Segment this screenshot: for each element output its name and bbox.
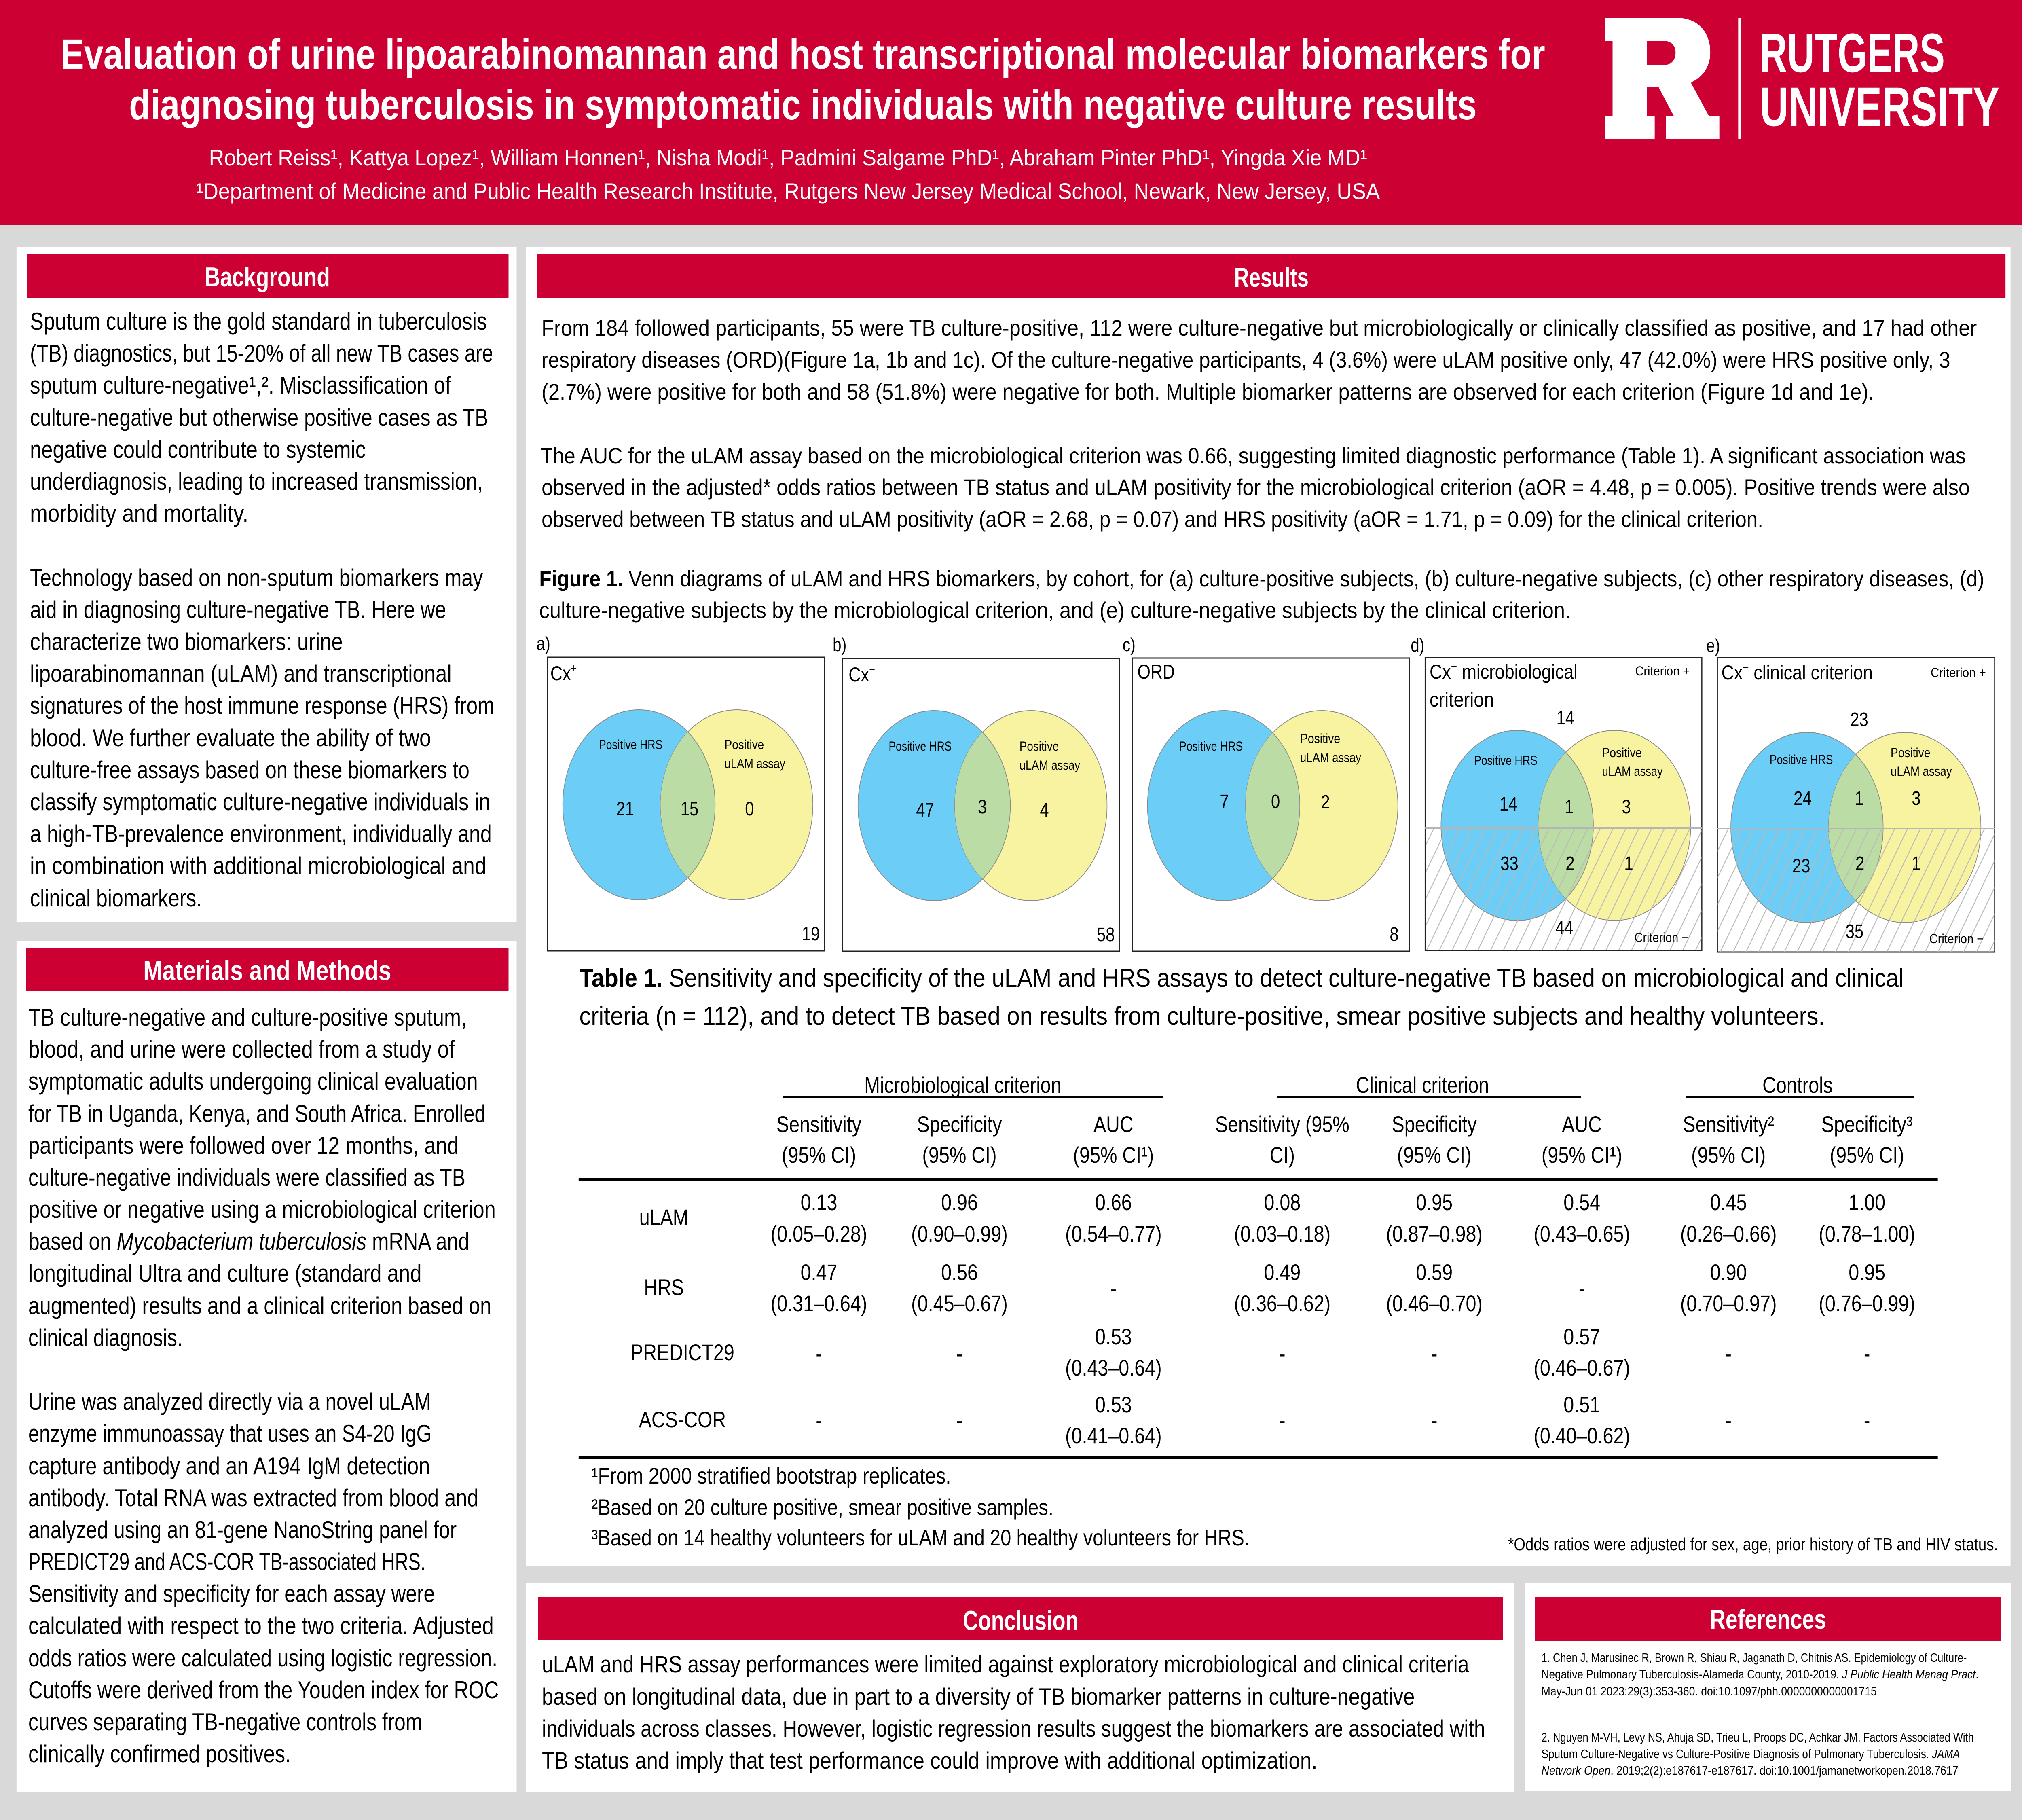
table column headers: (95% CI) (1397, 1142, 1472, 1168)
methods text block: analyzed using an 81-gene NanoString panel for (28, 1516, 457, 1543)
venn diagram d: microbiological criterion: 1 (1565, 796, 1574, 818)
methods text block: longitudinal Ultra and culture (standard and (28, 1260, 422, 1287)
methods text block: curves separating TB-negative controls from (28, 1708, 422, 1735)
background text block: blood. We further evaluate the ability of two (30, 724, 431, 751)
conclusion text: TB status and imply that test performance could improve with additional optimization. (542, 1748, 1318, 1774)
reference 1 (1542, 1651, 1979, 1699)
table row: uLAM: 1.00 (1849, 1189, 1885, 1215)
venn diagram c: other respiratory diseases: 7 (1220, 791, 1229, 813)
table column headers: (95% CI) (1830, 1142, 1904, 1168)
venn diagram e: clinical criterion: Criterion + (1931, 666, 1986, 680)
methods text block: Cutoffs were derived from the Youden index for ROC (28, 1676, 499, 1704)
figure 1 caption: Figure 1. Venn diagrams of uLAM and HRS biomarkers, by cohort, for (a) culture-positive subjects, (b) culture-negative subjects, (c) other respiratory diseases, (d) (539, 566, 1984, 591)
table group headers (783, 1072, 1914, 1098)
table row: ACS-COR: - (1864, 1407, 1870, 1433)
venn diagram c: other respiratory diseases: Positive HRS (1179, 739, 1243, 754)
table column headers (776, 1111, 1912, 1168)
methods text block: antibody. Total RNA was extracted from blood and (28, 1484, 478, 1511)
reference 1: 1. Chen J, Marusinec R, Brown R, Shiau R, Jaganath D, Chitnis AS. Epidemiology of Culture- (1542, 1651, 1967, 1665)
table row: uLAM: (0.90–0.99) (911, 1221, 1008, 1246)
results text: participants (541, 315, 1977, 404)
background text block: clinical biomarkers. (30, 885, 202, 912)
table row: ACS-COR: 0.53 (1095, 1392, 1132, 1417)
table column headers: Sensitivity² (1683, 1111, 1774, 1137)
background text block: characterize two biomarkers: urine (30, 628, 343, 655)
table row: HRS: 0.95 (1849, 1259, 1885, 1285)
venn diagram e: clinical criterion: 3 (1912, 788, 1920, 809)
venn diagram d: microbiological criterion (1411, 635, 1702, 950)
table row: uLAM: 0.08 (1264, 1189, 1301, 1215)
venn diagram b: culture negative (833, 635, 1119, 951)
conclusion text: individuals across classes. However, logistic regression results suggest the biomarkers are associated with (542, 1716, 1485, 1742)
table 1 caption: Table 1. Sensitivity and specificity of the uLAM and HRS assays to detect culture-negative TB based on microbiological and clinical (579, 964, 1904, 993)
table row: uLAM: 0.45 (1710, 1189, 1747, 1215)
venn diagram d: microbiological criterion: microbiological (1457, 660, 1578, 683)
table group headers: Controls (1762, 1072, 1833, 1098)
Rutgers logo: RUTGERS (1760, 22, 1945, 84)
venn diagram e: clinical criterion (1706, 635, 1995, 952)
venn diagram b: culture negative: Positive HRS (889, 739, 952, 754)
heading: results: Results (1234, 262, 1309, 293)
venn diagram c: other respiratory diseases: c) (1123, 635, 1136, 655)
venn diagram a: culture positive (537, 633, 825, 951)
table column headers: Specificity (917, 1111, 1002, 1137)
background text block: sputum culture-negative¹,². Misclassification of (30, 372, 451, 399)
table row: ACS-COR: - (816, 1407, 822, 1433)
methods text block: capture antibody and an A194 IgM detection (28, 1452, 430, 1479)
table row: HRS: 0.59 (1416, 1259, 1453, 1285)
venn diagram e: clinical criterion: 35 (1846, 921, 1863, 942)
venn diagram b: culture negative: Positive (1019, 739, 1059, 754)
venn diagram d: microbiological criterion: Cx (1430, 660, 1450, 683)
venn diagram d: microbiological criterion: 1 (1624, 853, 1633, 874)
title: diagnosing tuberculosis in symptomatic individuals with negative culture results (129, 82, 1477, 129)
venn diagram c: other respiratory diseases: 0 (1271, 791, 1280, 813)
methods text block: odds ratios were calculated using logistic regression. (28, 1644, 497, 1672)
venn diagram d: microbiological criterion: 44 (1555, 917, 1574, 939)
venn diagram c: other respiratory diseases: 2 (1321, 791, 1330, 813)
table row: ACS-COR: - (1279, 1407, 1286, 1433)
heading: conclusion: Conclusion (963, 1605, 1079, 1636)
table row: uLAM: uLAM (639, 1204, 689, 1230)
venn diagram e: clinical criterion: 23 (1850, 709, 1868, 730)
venn diagram a: culture positive: 21 (616, 798, 634, 820)
venn diagram a: culture positive: a) (537, 633, 550, 654)
venn diagram d: microbiological criterion: − (1451, 660, 1457, 673)
heading: materials and methods: Materials and Methods (143, 955, 391, 986)
table row: uLAM: (0.03–0.18) (1234, 1221, 1330, 1246)
background text block: (TB) diagnostics, but 15-20% of all new TB cases are (30, 340, 493, 367)
table column headers: Specificity (1392, 1111, 1477, 1137)
panel: background (17, 247, 516, 922)
venn diagram e: clinical criterion: Criterion − (1929, 932, 1984, 946)
results text: participants: (2.7%) were positive for both and 58 (51.8%) were negative for both. Multiple biomarker patterns are observed for each criterion (Figure 1d and 1e). (541, 379, 1874, 404)
table row: uLAM: 0.13 (801, 1189, 837, 1215)
background text block: Sputum culture is the gold standard in tuberculosis (30, 308, 487, 335)
table row: ACS-COR (639, 1392, 1870, 1448)
table row: PREDICT29: - (1725, 1341, 1732, 1366)
heading: references: References (1710, 1604, 1826, 1635)
panel: results (526, 247, 2011, 1566)
table row: PREDICT29: 0.53 (1095, 1324, 1132, 1349)
venn diagram a: culture positive: + (571, 661, 577, 675)
venn diagram b: culture negative: 47 (916, 800, 934, 821)
background text block: aid in diagnosing culture-negative TB. Here we (30, 596, 446, 623)
Rutgers logo (1605, 18, 1999, 139)
table group headers: Microbiological criterion (864, 1072, 1062, 1098)
venn diagram e: clinical criterion: uLAM assay (1891, 764, 1952, 779)
table row: PREDICT29: (0.46–0.67) (1533, 1355, 1630, 1380)
venn diagram d: microbiological criterion: Positive HRS (1474, 753, 1538, 768)
table 1 caption (579, 964, 1904, 1031)
background text block (30, 308, 495, 912)
venn diagram b: culture negative: b) (833, 635, 846, 655)
methods text block: for TB in Uganda, Kenya, and South Africa. Enrolled (28, 1100, 486, 1127)
venn diagram d: microbiological criterion: 2 (1565, 853, 1575, 874)
background text block: culture-negative but otherwise positive cases as TB (30, 404, 489, 431)
methods text block: culture-negative individuals were classified as TB (28, 1164, 465, 1191)
methods text block: PREDICT29 and ACS-COR TB-associated HRS. (28, 1548, 426, 1575)
venn diagram a: culture positive: uLAM assay (725, 757, 785, 771)
heading: conclusion (538, 1597, 1503, 1640)
table row: ACS-COR: - (1725, 1407, 1732, 1433)
venn diagram d: microbiological criterion: Criterion + (1635, 664, 1690, 679)
table row: ACS-COR: - (1431, 1407, 1437, 1433)
reference 2 (1542, 1731, 1974, 1778)
venn diagram e: clinical criterion: − (1743, 660, 1749, 674)
venn diagram d: microbiological criterion: 3 (1622, 796, 1631, 818)
venn diagram a: culture positive: 15 (681, 798, 698, 820)
methods text block: Sensitivity and specificity for each assay were (28, 1580, 435, 1607)
venn diagram d: microbiological criterion: uLAM assay (1602, 764, 1663, 779)
table row: HRS: (0.70–0.97) (1680, 1291, 1777, 1316)
venn diagram e: clinical criterion: e) (1706, 635, 1720, 656)
venn diagram e: clinical criterion: clinical criterion (1749, 661, 1873, 684)
venn diagram a: culture positive: Cx (550, 662, 571, 685)
reference 1: Negative Pulmonary Tuberculosis-Alameda County, 2010-2019. J Public Health Manag Pract. (1542, 1668, 1979, 1682)
methods text block: augmented) results and a clinical criterion based on (28, 1292, 491, 1319)
table group headers: Clinical criterion (1356, 1072, 1489, 1098)
table row: HRS: (0.76–0.99) (1819, 1291, 1915, 1316)
background text block: morbidity and mortality. (30, 500, 248, 527)
heading: results (537, 254, 2005, 298)
methods text block: enzyme immunoassay that uses an S4-20 IgG (28, 1420, 432, 1447)
table row: ACS-COR: (0.41–0.64) (1065, 1423, 1162, 1448)
table column headers: AUC (1562, 1111, 1602, 1137)
venn diagram b: culture negative: 4 (1040, 800, 1049, 821)
methods text block: clinical diagnosis. (28, 1324, 183, 1351)
venn diagram a: culture positive: Positive HRS (599, 738, 662, 752)
heading: references (1535, 1597, 2001, 1641)
header banner (0, 0, 2022, 225)
reference 1: May-Jun 01 2023;29(3):353-360. doi:10.1097/phh.0000000000001715 (1542, 1685, 1877, 1699)
table row: uLAM: (0.26–0.66) (1680, 1221, 1777, 1246)
table row: ACS-COR: ACS-COR (639, 1407, 726, 1432)
table row: PREDICT29: - (1864, 1341, 1870, 1366)
table footnotes: ²Based on 20 culture positive, smear positive samples. (591, 1494, 1053, 1520)
table row: ACS-COR: (0.40–0.62) (1533, 1423, 1630, 1448)
background text block: lipoarabinomannan (uLAM) and transcriptional (30, 660, 452, 687)
table row: HRS: (0.36–0.62) (1234, 1291, 1330, 1316)
table footnotes: ³Based on 14 healthy volunteers for uLAM and 20 healthy volunteers for HRS. (591, 1525, 1250, 1550)
heading: materials and methods (26, 948, 509, 991)
table row: HRS: (0.46–0.70) (1386, 1291, 1483, 1316)
venn diagram e: clinical criterion: 23 (1792, 855, 1810, 877)
venn diagram b: culture negative: uLAM assay (1019, 758, 1080, 773)
table row: PREDICT29: (0.43–0.64) (1065, 1355, 1162, 1380)
table row: PREDICT29: - (956, 1341, 962, 1366)
panel: conclusion (526, 1583, 1514, 1792)
methods text block: symptomatic adults undergoing clinical evaluation (28, 1068, 478, 1095)
venn diagram c: other respiratory diseases: ORD (1138, 660, 1175, 683)
conclusion text: uLAM and HRS assay performances were limited against exploratory microbiological and clinical criteria (542, 1652, 1469, 1678)
venn diagram e: clinical criterion: 2 (1855, 853, 1864, 874)
affiliation: ¹Department of Medicine and Public Health Research Institute, Rutgers New Jersey Medical School, Newark, New Jersey, USA (196, 178, 1380, 204)
venn diagram c: other respiratory diseases (1123, 635, 1409, 951)
table row: PREDICT29 (630, 1324, 1870, 1380)
conclusion text: based on longitudinal data, due in part to a diversity of TB biomarker patterns in culture-negative (542, 1684, 1415, 1710)
venn diagram c: other respiratory diseases: 8 (1390, 924, 1399, 945)
methods text block: Urine was analyzed directly via a novel uLAM (28, 1388, 431, 1415)
venn diagram e: clinical criterion: Cx (1722, 661, 1742, 684)
background text block: signatures of the host immune response (HRS) from (30, 692, 495, 719)
venn diagram d: microbiological criterion: Positive (1602, 746, 1642, 760)
table column headers: Sensitivity (95% (1215, 1111, 1349, 1137)
venn diagram d: microbiological criterion: 14 (1557, 707, 1574, 729)
venn diagram c: other respiratory diseases: uLAM assay (1300, 751, 1361, 765)
methods text block: calculated with respect to the two criteria. Adjusted (28, 1612, 494, 1639)
results text: AUC and odds ratios: observed in the adjusted* odds ratios between TB status and uLAM positivity for the microbiological criterion (aOR = 4.48, p = 0.005). Positive trends were also (541, 474, 1970, 500)
venn diagram d: microbiological criterion: d) (1411, 635, 1424, 656)
methods text block: participants were followed over 12 months, and (28, 1132, 459, 1159)
venn diagram c: other respiratory diseases: Positive (1300, 732, 1340, 746)
table column headers: Specificity³ (1821, 1111, 1912, 1137)
figure 1 caption (539, 566, 1984, 623)
table column headers: (95% CI) (922, 1142, 997, 1168)
background text block: negative could contribute to systemic (30, 436, 366, 463)
venn diagram d: microbiological criterion: 33 (1500, 853, 1519, 874)
table row: uLAM: 0.66 (1095, 1189, 1132, 1215)
background text block: culture-free assays based on these biomarkers to (30, 756, 470, 783)
table row: uLAM: (0.87–0.98) (1386, 1221, 1483, 1246)
venn diagram b: culture negative: 58 (1097, 924, 1115, 946)
methods text block: clinically confirmed positives. (28, 1740, 291, 1767)
background text block: classify symptomatic culture-negative individuals in (30, 788, 491, 815)
venn diagram b: culture negative: 3 (978, 796, 987, 818)
heading: background (27, 254, 509, 298)
table row: HRS: 0.90 (1710, 1259, 1747, 1285)
venn diagram a: culture positive: 0 (745, 798, 754, 820)
table row: uLAM: (0.05–0.28) (771, 1221, 867, 1246)
background text block: underdiagnosis, leading to increased transmission, (30, 468, 483, 495)
table row: ACS-COR: - (956, 1407, 962, 1433)
background text block: Technology based on non-sputum biomarkers may (30, 564, 483, 591)
table row: uLAM: (0.54–0.77) (1065, 1221, 1162, 1246)
table row: PREDICT29: - (816, 1341, 822, 1366)
table column headers: (95% CI¹) (1542, 1142, 1622, 1168)
venn diagram b: culture negative: Cx (848, 663, 869, 686)
results text: AUC and odds ratios: The AUC for the uLAM assay based on the microbiological criterion was 0.66, suggesting limited diagnostic performance (Table 1). A significant association was (541, 443, 1966, 468)
results text: participants: From 184 followed participants, 55 were TB culture-positive, 112 were culture-negative but microbiologically or clinically classified as positive, and 17 had other (541, 315, 1977, 341)
table column headers: Sensitivity (776, 1111, 861, 1137)
table row: HRS: 0.56 (941, 1259, 978, 1285)
venn diagram d: microbiological criterion: criterion (1430, 688, 1494, 711)
table footnotes (591, 1463, 1250, 1550)
table row: PREDICT29: 0.57 (1563, 1324, 1600, 1349)
venn diagram a: culture positive: 19 (802, 923, 820, 945)
table column headers: (95% CI¹) (1073, 1142, 1154, 1168)
venn diagram a: culture positive: Positive (725, 738, 764, 752)
table row: PREDICT29: - (1431, 1341, 1437, 1366)
table row: HRS: 0.47 (801, 1259, 837, 1285)
table row: HRS: (0.45–0.67) (911, 1291, 1008, 1316)
table row: HRS: - (1110, 1276, 1117, 1301)
venn diagram d: microbiological criterion: Criterion − (1635, 931, 1688, 945)
results text: AUC and odds ratios: observed between TB status and uLAM positivity (aOR = 2.68, p = 0.07) and HRS positivity (aOR = 1.71, p = 0.09) for the clinical criterion. (541, 506, 1763, 532)
table row: uLAM: 0.96 (941, 1189, 978, 1215)
table row: PREDICT29: PREDICT29 (630, 1340, 734, 1365)
results text: participants: respiratory diseases (ORD)(Figure 1a, 1b and 1c). Of the culture-negative participants, 4 (3.6%) were uLAM positive only, 47 (42.0%) were HRS positive only, 3 (541, 347, 1950, 372)
table row: HRS: 0.49 (1264, 1259, 1301, 1285)
title: Evaluation of urine lipoarabinomannan and host transcriptional molecular biomarkers for (61, 31, 1545, 78)
table row: HRS: HRS (644, 1274, 684, 1300)
reference 2: Network Open. 2019;2(2):e187617-e187617. doi:10.1001/jamanetworkopen.2018.7617 (1542, 1764, 1959, 1778)
venn diagram b: culture negative: − (869, 662, 875, 676)
venn diagram e: clinical criterion: Positive (1891, 746, 1930, 760)
table row: PREDICT29: - (1279, 1341, 1286, 1366)
conclusion text (542, 1652, 1485, 1774)
panel: references (1525, 1583, 2011, 1791)
table 1 caption: criteria (n = 112), and to detect TB based on results from culture-positive, smear positive subjects and healthy volunteers. (579, 1002, 1825, 1031)
table column headers: (95% CI) (782, 1142, 856, 1168)
title (61, 31, 1545, 129)
methods text block (28, 1004, 499, 1767)
reference 2: 2. Nguyen M-VH, Levy NS, Ahuja SD, Trieu L, Proops DC, Achkar JM. Factors Associated With (1542, 1731, 1974, 1745)
methods text block: positive or negative using a microbiological criterion (28, 1196, 496, 1223)
panel: materials and methods (17, 941, 516, 1792)
venn diagram e: clinical criterion: 1 (1912, 853, 1920, 874)
table column headers: CI) (1270, 1142, 1295, 1168)
table row: HRS: - (1579, 1276, 1585, 1301)
table row: HRS (644, 1259, 1915, 1316)
venn diagram d: microbiological criterion: 14 (1500, 794, 1517, 815)
table row: uLAM: 0.95 (1416, 1189, 1453, 1215)
table row: ACS-COR: 0.51 (1563, 1392, 1600, 1417)
table column headers: (95% CI) (1691, 1142, 1766, 1168)
background text block: in combination with additional microbiological and (30, 852, 486, 879)
table footnotes: ¹From 2000 stratified bootstrap replicates. (591, 1463, 951, 1488)
methods text block: TB culture-negative and culture-positive sputum, (28, 1004, 467, 1031)
methods text block: based on Mycobacterium tuberculosis mRNA and (28, 1228, 470, 1255)
table row: HRS: (0.31–0.64) (771, 1291, 867, 1316)
venn diagram e: clinical criterion: Positive HRS (1770, 753, 1833, 767)
reference 2: Sputum Culture-Negative vs Culture-Positive Diagnosis of Pulmonary Tuberculosis. JAMA (1542, 1747, 1960, 1761)
table row: uLAM: (0.43–0.65) (1533, 1221, 1630, 1246)
authors: Robert Reiss¹, Kattya Lopez¹, William Honnen¹, Nisha Modi¹, Padmini Salgame PhD¹, Abraham Pinter PhD¹, Yingda Xie MD¹ (209, 145, 1367, 170)
table 1 (579, 1072, 1938, 1459)
venn diagram e: clinical criterion: 1 (1855, 788, 1864, 809)
figure 1 caption: culture-negative subjects by the microbiological criterion, and (e) culture-negative subjects by the clinical criterion. (539, 597, 1571, 623)
background text block: a high-TB-prevalence environment, individually and (30, 820, 492, 847)
odds ratio note: *Odds ratios were adjusted for sex, age, prior history of TB and HIV status. (1508, 1534, 1998, 1554)
table row: uLAM: (0.78–1.00) (1819, 1221, 1915, 1246)
table column headers: AUC (1093, 1111, 1134, 1137)
venn diagram e: clinical criterion: 24 (1794, 788, 1812, 809)
heading: background: Background (205, 262, 330, 292)
table row: uLAM: 0.54 (1563, 1189, 1600, 1215)
methods text block: blood, and urine were collected from a study of (28, 1036, 455, 1063)
table row: uLAM (639, 1189, 1915, 1246)
results text: AUC and odds ratios (541, 443, 1970, 532)
